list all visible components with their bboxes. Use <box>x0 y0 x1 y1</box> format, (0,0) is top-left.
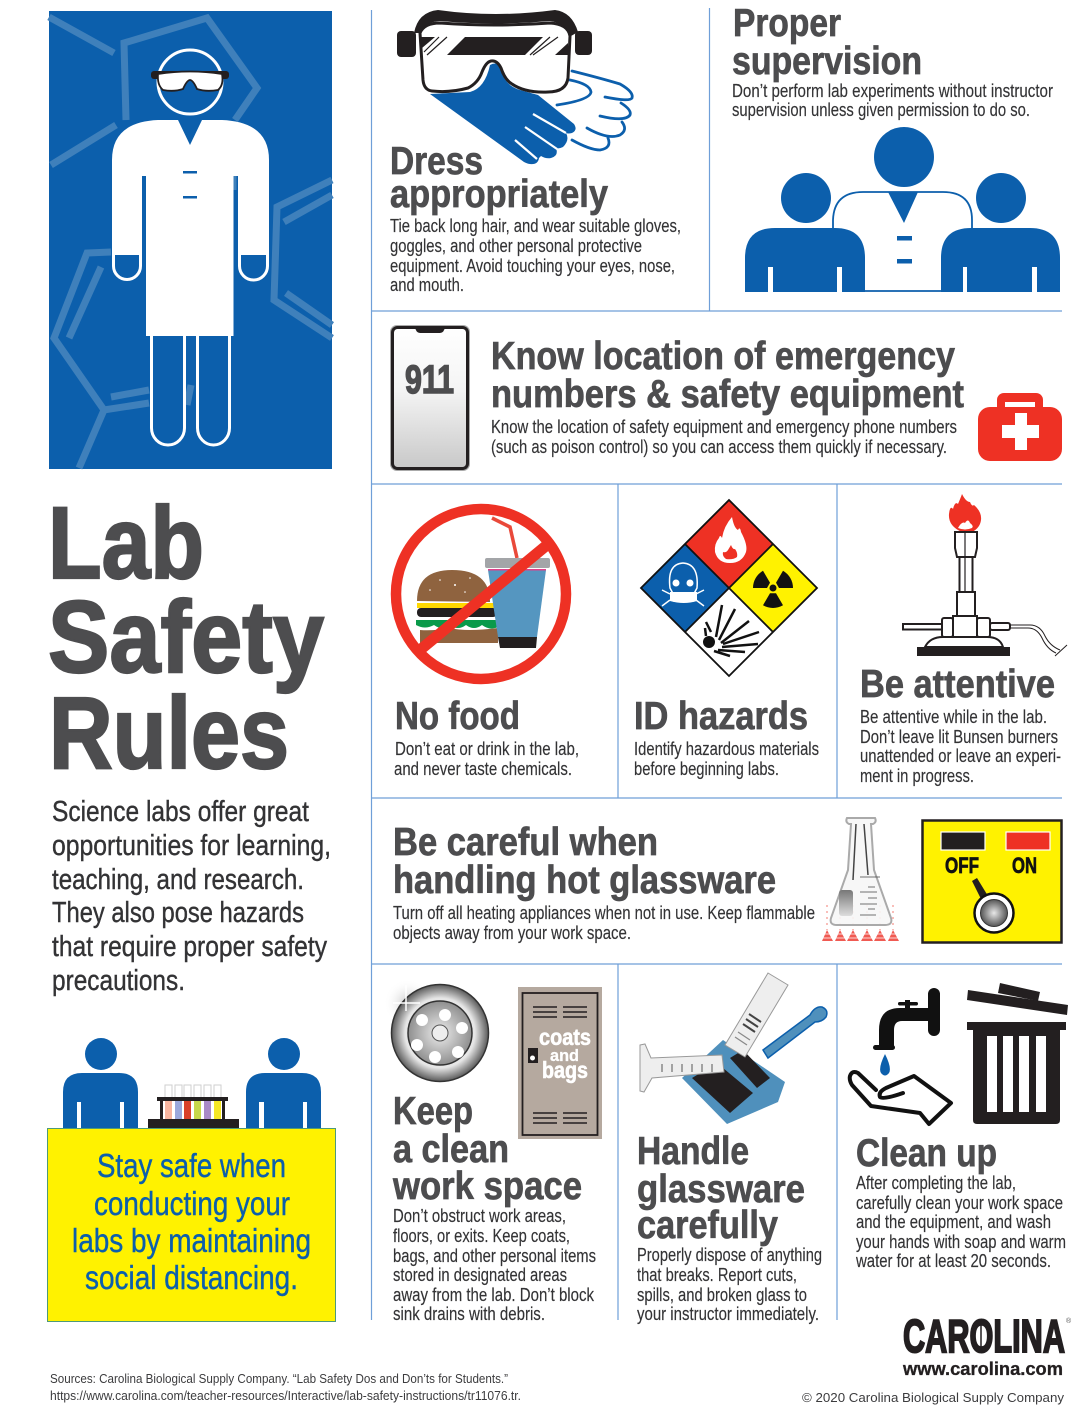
heading: handle glassware <box>637 1130 805 1247</box>
figure: legs <box>152 336 230 445</box>
intro text: Science labs offer great <box>52 796 309 828</box>
icon: goggles <box>397 10 592 92</box>
text: proper supervision <box>732 81 1053 120</box>
copyright: © 2020 Carolina Biological Supply Company <box>802 1391 1065 1405</box>
icon: hot flask <box>822 818 899 941</box>
text: id hazards <box>634 739 819 779</box>
heading: handle glassware: carefully <box>637 1204 778 1247</box>
text: dress appropriately: Tie back long hair, and wear suitable gloves, <box>390 216 681 236</box>
icon: bunsen burner <box>903 494 1067 656</box>
icon: two people with test tube rack <box>63 1038 321 1128</box>
panel: id hazards <box>634 500 819 779</box>
text: handle glassware: that breaks. Report cuts, <box>637 1265 797 1285</box>
callout: social distancing <box>48 1128 336 1322</box>
text: id hazards: before beginning labs. <box>634 759 779 779</box>
heading: clean work space: a clean <box>393 1128 509 1171</box>
icon: dustpan and broken glassware <box>640 973 827 1124</box>
callout: social distancing: social distancing. <box>85 1259 298 1296</box>
heading: no food: No food <box>395 695 520 738</box>
icon: locker <box>518 987 602 1139</box>
icon: locker: bags <box>542 1057 588 1083</box>
figure: lab coat <box>112 120 269 336</box>
text: clean up: water for at least 20 seconds. <box>855 1251 1051 1271</box>
text: hot glassware: Turn off all heating appliances when not in use. Keep flammable <box>393 903 815 923</box>
intro text: teaching, and research. <box>52 864 304 896</box>
icon: off/on switch <box>922 820 1062 942</box>
heading: dress appropriately: Dress <box>390 140 483 183</box>
sources: Sources: Carolina Biological Supply Company. “Lab Safety Dos and Don’ts for Students.” <box>50 1372 508 1386</box>
sources: https://www.carolina.com/teacher-resources/Interactive/lab-safety-instructions/tr11076.tr. <box>50 1389 521 1403</box>
text: clean work space: away from the lab. Don’t block <box>393 1285 595 1305</box>
text: handle glassware: Properly dispose of anything <box>637 1245 822 1265</box>
panel: emergency numbers <box>390 325 1062 471</box>
heading: clean work space <box>392 1090 582 1208</box>
text: handle glassware <box>637 1245 822 1324</box>
heading: clean up: Clean up <box>856 1132 997 1175</box>
panel: hot glassware <box>393 818 1062 943</box>
text: be attentive: Be attentive while in the lab. <box>860 707 1047 727</box>
intro text: precautions. <box>52 965 185 997</box>
text: dress appropriately: equipment. Avoid touching your eyes, nose, <box>390 256 675 276</box>
text: handle glassware: your instructor immediately. <box>637 1304 819 1324</box>
heading: hot glassware <box>393 821 776 902</box>
panel: clean up <box>850 983 1068 1271</box>
icon: gloves <box>430 64 632 164</box>
text: handle glassware: spills, and broken glass to <box>637 1285 807 1305</box>
callout: social distancing: labs by maintaining <box>72 1222 311 1259</box>
logo: carolina: www.carolina.com <box>902 1359 1063 1379</box>
icon: off/on switch: ON <box>1012 853 1037 878</box>
text: clean work space: bags, and other personal items <box>393 1246 596 1266</box>
icon: locker: and <box>550 1046 579 1065</box>
text: dress appropriately <box>390 216 681 295</box>
callout: social distancing: conducting your <box>94 1185 290 1222</box>
icon: faucet and hand <box>850 988 951 1124</box>
panel: handle glassware <box>637 973 827 1324</box>
text: clean up: After completing the lab, <box>856 1173 1016 1193</box>
heading: handle glassware: glassware <box>637 1168 805 1211</box>
logo: carolina: ® <box>1066 1317 1072 1325</box>
title: Safety <box>48 580 324 694</box>
icon: phone 911 <box>390 325 470 471</box>
heading: proper supervision <box>732 2 922 83</box>
sources <box>50 1372 521 1403</box>
text: clean up: and the equipment, and wash <box>856 1212 1051 1232</box>
panel: dress appropriately <box>390 10 681 295</box>
panel: scientist in lab coat <box>49 11 332 469</box>
text: dress appropriately: and mouth. <box>390 275 464 295</box>
title: Rules <box>49 676 289 790</box>
icon: trash can <box>967 983 1068 1124</box>
heading: id hazards: ID hazards <box>634 695 808 738</box>
text: dress appropriately: goggles, and other personal protective <box>390 236 642 256</box>
icon: no food sign <box>396 509 566 679</box>
text: be attentive <box>860 707 1061 786</box>
text: no food: and never taste chemicals. <box>394 759 572 779</box>
heading: be attentive: Be attentive <box>860 663 1055 706</box>
heading: handle glassware: Handle <box>637 1130 749 1173</box>
heading: clean work space: work space <box>392 1165 582 1208</box>
text: hot glassware <box>393 903 815 943</box>
heading: dress appropriately <box>390 140 608 216</box>
intro text: that require proper safety <box>52 931 327 963</box>
title: Lab <box>48 486 204 600</box>
panel: proper supervision <box>732 2 1060 292</box>
intro text <box>52 796 331 997</box>
figure: head <box>158 50 222 114</box>
text: clean work space: stored in designated areas <box>393 1265 567 1285</box>
heading: emergency numbers: numbers & safety equipment <box>491 373 964 416</box>
text: clean work space <box>393 1206 596 1324</box>
text: emergency numbers <box>491 417 957 457</box>
icon: off/on switch: OFF <box>945 853 979 878</box>
text: clean work space: Don’t obstruct work areas, <box>393 1206 566 1226</box>
intro text: They also pose hazards <box>52 897 304 929</box>
title <box>48 486 324 790</box>
heading: dress appropriately: appropriately <box>390 173 608 216</box>
text: no food: Don’t eat or drink in the lab, <box>395 739 579 759</box>
icon: phone 911: 911 <box>405 358 454 402</box>
panel: be attentive <box>860 494 1067 786</box>
icon: safety glasses <box>151 71 229 91</box>
text: hot glassware: objects away from your work space. <box>393 923 631 943</box>
text: id hazards: Identify hazardous materials <box>634 739 819 759</box>
text: emergency numbers: Know the location of safety equipment and emergency phone numbers <box>491 417 957 437</box>
text: clean work space: floors, or exits. Keep coats, <box>393 1226 570 1246</box>
heading: proper supervision: Proper <box>733 2 841 45</box>
heading: emergency numbers: Know location of emergency <box>491 335 955 378</box>
panel: clean work space <box>384 979 602 1324</box>
text: emergency numbers: (such as poison control) so you can access them quickly if necessary. <box>491 437 947 457</box>
callout: social distancing: Stay safe when <box>97 1147 286 1184</box>
icon: hazard diamond <box>641 500 817 676</box>
text: clean up <box>855 1173 1066 1271</box>
heading: emergency numbers <box>491 335 964 416</box>
text: no food <box>394 739 579 779</box>
heading: hot glassware: Be careful when <box>393 821 658 864</box>
panel: no food <box>394 509 579 779</box>
icon: first aid kit <box>978 393 1062 461</box>
text: clean work space: sink drains with debris. <box>393 1304 545 1324</box>
icon: instructor with two students <box>745 127 1060 292</box>
text: be attentive: ment in progress. <box>860 766 974 786</box>
intro text: opportunities for learning, <box>52 830 331 862</box>
heading: hot glassware: handling hot glassware <box>393 859 776 902</box>
icon: locker: coats <box>539 1024 591 1050</box>
heading: proper supervision: supervision <box>732 40 922 83</box>
heading: clean work space: Keep <box>393 1090 473 1133</box>
icon: sink drain <box>384 979 488 1082</box>
text: proper supervision: supervision unless given permission to do so. <box>732 100 1030 120</box>
